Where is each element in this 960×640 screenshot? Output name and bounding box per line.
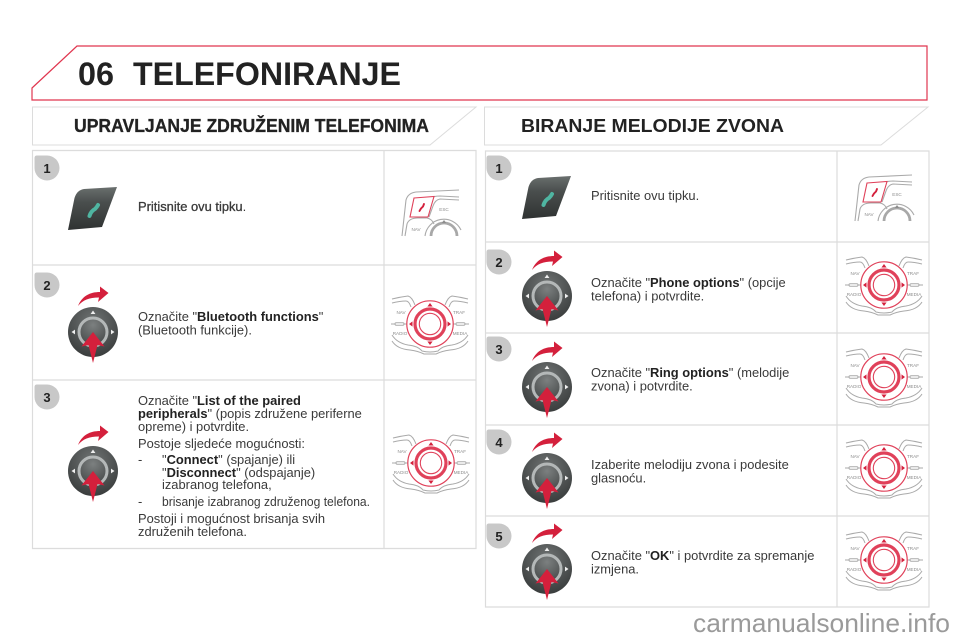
text: right step 3: zvona) i potvrdite. [591, 378, 693, 394]
panel: right heading [484, 107, 928, 145]
diagram: control wheel: MEDIA [453, 331, 468, 336]
icon: knob with arrows [522, 432, 572, 509]
text: right step 1: Pritisnite ovu tipku. [591, 188, 699, 203]
panel: left steps [32, 150, 476, 548]
diagram: control wheel: RADIO [847, 475, 862, 480]
text: right step 4: glasnoću. [591, 470, 646, 486]
diagram: control wheel: MEDIA [907, 384, 922, 389]
diagram: control wheel: TRAF [907, 363, 919, 368]
badge: left step 3 [34, 384, 60, 410]
diagram: control wheel: TRAF [907, 546, 919, 551]
badge: right step 4: 4 [495, 435, 503, 450]
diagram: phone key [402, 190, 461, 236]
watermark: carmanualsonline.info [693, 608, 950, 638]
text: left step 2: Označite "Bluetooth functions" [138, 309, 323, 324]
diagram: control wheel: TRAF [907, 271, 919, 276]
diagram: control wheel [845, 349, 923, 407]
diagram: control wheel [391, 296, 469, 354]
diagram: control wheel: RADIO [393, 331, 408, 336]
badge: right step 2: 2 [495, 255, 503, 270]
icon: phone button [522, 176, 571, 219]
icon: knob with arrows [68, 286, 118, 363]
diagram: control wheel: NAV [850, 454, 860, 459]
text: left step 3: Postoji i mogućnost brisanja svih [138, 511, 325, 526]
text: right step 3: Označite "Ring options" (melodije [591, 365, 789, 380]
icon: knob with arrows [522, 342, 572, 418]
diagram: control wheel: NAV [396, 310, 406, 315]
badge: left step 1: 1 [43, 161, 51, 176]
text: left step 3: - [138, 452, 142, 467]
text: left step 3: " [162, 452, 167, 467]
text: left step 3: Connect" (spajanje) ili [167, 452, 295, 467]
text: right step 5: Označite "OK" i potvrdite za spremanje [591, 548, 814, 563]
diagram: control wheel: RADIO [847, 292, 862, 297]
diagram: control wheel: NAV [850, 363, 860, 368]
text: left step 1: Pritisnite ovu tipku. [138, 199, 246, 214]
text: left step 2: (Bluetooth funkcije). [138, 322, 252, 338]
text: left step 3: Postoje sljedeće mogućnosti: [138, 436, 305, 451]
diagram: control wheel: NAV [397, 449, 407, 454]
badge: left step 3: 3 [43, 390, 51, 405]
badge: left step 1 [34, 156, 60, 180]
diagram: phone key: ESC [892, 192, 902, 197]
badge: left step 2 [34, 272, 60, 298]
badge: right step 2 [486, 250, 511, 274]
title [32, 46, 927, 100]
badge: right step 3: 3 [495, 342, 503, 357]
badge: right step 5: 5 [495, 529, 503, 544]
icon: knob with arrows [68, 426, 118, 502]
diagram: control wheel: TRAF [907, 454, 919, 459]
text: right step 2: Označite "Phone options" (opcije [591, 275, 786, 290]
diagram: control wheel: TRAF [453, 310, 465, 315]
text: left step 3: Disconnect" (odspajanje) [167, 465, 315, 480]
icon: knob with arrows [522, 524, 572, 600]
diagram: phone key: ESC [439, 207, 449, 212]
badge: right step 3 [486, 336, 511, 362]
text: left step 3: opreme) i potvrdite. [138, 419, 249, 434]
diagram: control wheel: RADIO [847, 567, 862, 572]
text: left step 3: Označite "List of the paired [138, 393, 301, 408]
title: TELEFONIRANJE [133, 56, 401, 92]
diagram: control wheel: NAV [850, 271, 860, 276]
diagram: control wheel [845, 440, 923, 498]
diagram: control wheel: RADIO [394, 470, 409, 475]
badge: right step 1 [486, 156, 511, 180]
title: 06 [78, 56, 114, 92]
panel: right heading: BIRANJE MELODIJE ZVONA [521, 116, 784, 136]
badge: right step 1: 1 [495, 161, 503, 176]
diagram: control wheel: MEDIA [907, 475, 922, 480]
text: left step 3: - [138, 494, 142, 509]
text: left step 3: združenih telefona. [138, 524, 247, 539]
diagram: control wheel [845, 532, 923, 590]
diagram: control wheel [392, 435, 470, 493]
badge: right step 5 [486, 524, 511, 548]
text: left step 3: peripherals [138, 406, 208, 421]
badge: left step 2: 2 [43, 278, 51, 293]
text: right step 5: izmjena. [591, 562, 639, 576]
text: left step 3: izabranog telefona, [162, 477, 272, 492]
diagram: phone key [855, 175, 914, 221]
badge: right step 4 [486, 430, 511, 454]
diagram: control wheel: MEDIA [907, 567, 922, 572]
icon: knob with arrows [522, 250, 572, 327]
panel: left heading: UPRAVLJANJE ZDRUŽENIM TELEFONIMA [74, 115, 429, 136]
text: left step 3: " (popis združene periferne [208, 406, 362, 421]
diagram: control wheel [845, 257, 923, 315]
diagram: control wheel: MEDIA [454, 470, 469, 475]
diagram: control wheel: TRAF [454, 449, 466, 454]
text: left step 3: brisanje izabranog združenog telefona. [162, 494, 370, 509]
text: right step 4: Izaberite melodiju zvona i podesite [591, 457, 789, 472]
panel: right steps [486, 151, 929, 607]
icon: phone button [68, 187, 117, 230]
diagram: control wheel: NAV [850, 546, 860, 551]
diagram: control wheel: MEDIA [907, 292, 922, 297]
diagram: phone key: NAV [411, 227, 421, 232]
diagram: phone key: NAV [864, 212, 874, 217]
text: right step 2: telefona) i potvrdite. [591, 288, 704, 304]
text: left step 3: " [162, 465, 167, 480]
panel: left heading [32, 107, 476, 145]
diagram: control wheel: RADIO [847, 384, 862, 389]
